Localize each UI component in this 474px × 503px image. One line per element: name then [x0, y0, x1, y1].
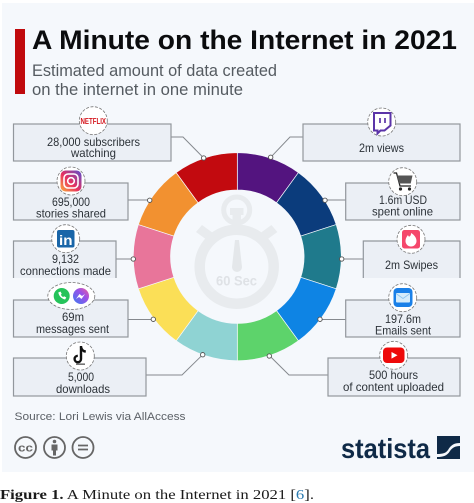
statista logo: statista — [341, 433, 430, 464]
panel: Netflix: watching — [70, 146, 116, 160]
donut chart: ten segments — [133, 153, 341, 361]
panel: YouTube: of content uploaded — [343, 380, 444, 394]
icon: Twitch — [368, 108, 396, 136]
icon: Netflix: NETFLIX — [80, 117, 106, 126]
icon: stopwatch with 60 Sec: 60 Sec — [216, 272, 257, 288]
connector lines — [116, 137, 363, 375]
connector end dots — [131, 155, 344, 358]
subtitle: on the internet in one minute — [32, 81, 243, 99]
icon: LinkedIn: in — [59, 232, 72, 248]
panel: LinkedIn — [14, 225, 116, 278]
source note: Source: Lori Lewis via AllAccess — [14, 411, 186, 423]
panel: messaging apps — [14, 282, 128, 337]
subtitle — [32, 62, 277, 99]
title accent bar — [15, 29, 25, 94]
panel: Instagram: 695,000 — [52, 195, 90, 209]
icon: shopping cart — [389, 168, 417, 196]
panel: YouTube — [328, 341, 460, 396]
panel: Instagram: stories shared — [36, 206, 106, 220]
icon: stopwatch with 60 Sec — [196, 197, 277, 304]
icon: Creative Commons licence badges: cc — [18, 442, 33, 454]
figure caption: Figure 1. A Minute on the Internet in 2021 [ 6]. — [0, 488, 314, 503]
panel: online shopping — [346, 168, 460, 220]
panel: online shopping: spent online — [372, 204, 433, 218]
panel: TikTok: 5,000 — [68, 370, 94, 384]
panel: Tinder — [363, 225, 460, 278]
panel: online shopping: 1.6m USD — [379, 193, 427, 207]
icon: Netflix — [79, 107, 107, 135]
panel: Netflix: 28,000 subscribers — [47, 135, 140, 149]
panel: email: Emails sent — [375, 324, 432, 338]
panel: TikTok: downloads — [56, 382, 110, 396]
subtitle: Estimated amount of data created — [32, 62, 277, 80]
panel: messaging apps: messages sent — [36, 322, 110, 336]
icon: statista mark — [437, 436, 460, 459]
panel: Netflix — [14, 107, 171, 161]
icon: Tinder — [397, 225, 425, 253]
panel: messaging apps: 69m — [62, 310, 84, 324]
panel: Twitch: 2m views — [359, 141, 404, 155]
icon: Creative Commons licence badges — [15, 437, 94, 458]
panel: TikTok — [14, 342, 146, 396]
panel: Tinder: 2m Swipes — [385, 258, 438, 272]
panel: LinkedIn: 9,132 — [52, 252, 79, 266]
icon: WhatsApp and Messenger — [48, 282, 95, 310]
icon: TikTok — [66, 342, 94, 370]
panel: email — [346, 284, 460, 338]
panel: YouTube: 500 hours — [369, 368, 418, 382]
icon: Instagram — [57, 167, 85, 195]
title: A Minute on the Internet in 2021 — [32, 25, 457, 55]
panel: LinkedIn: connections made — [20, 264, 111, 278]
icon: mail — [389, 284, 417, 312]
panel: Twitch — [303, 108, 460, 161]
panel: email: 197.6m — [385, 312, 421, 326]
icon: YouTube — [380, 341, 408, 369]
panel: Instagram — [14, 167, 128, 220]
